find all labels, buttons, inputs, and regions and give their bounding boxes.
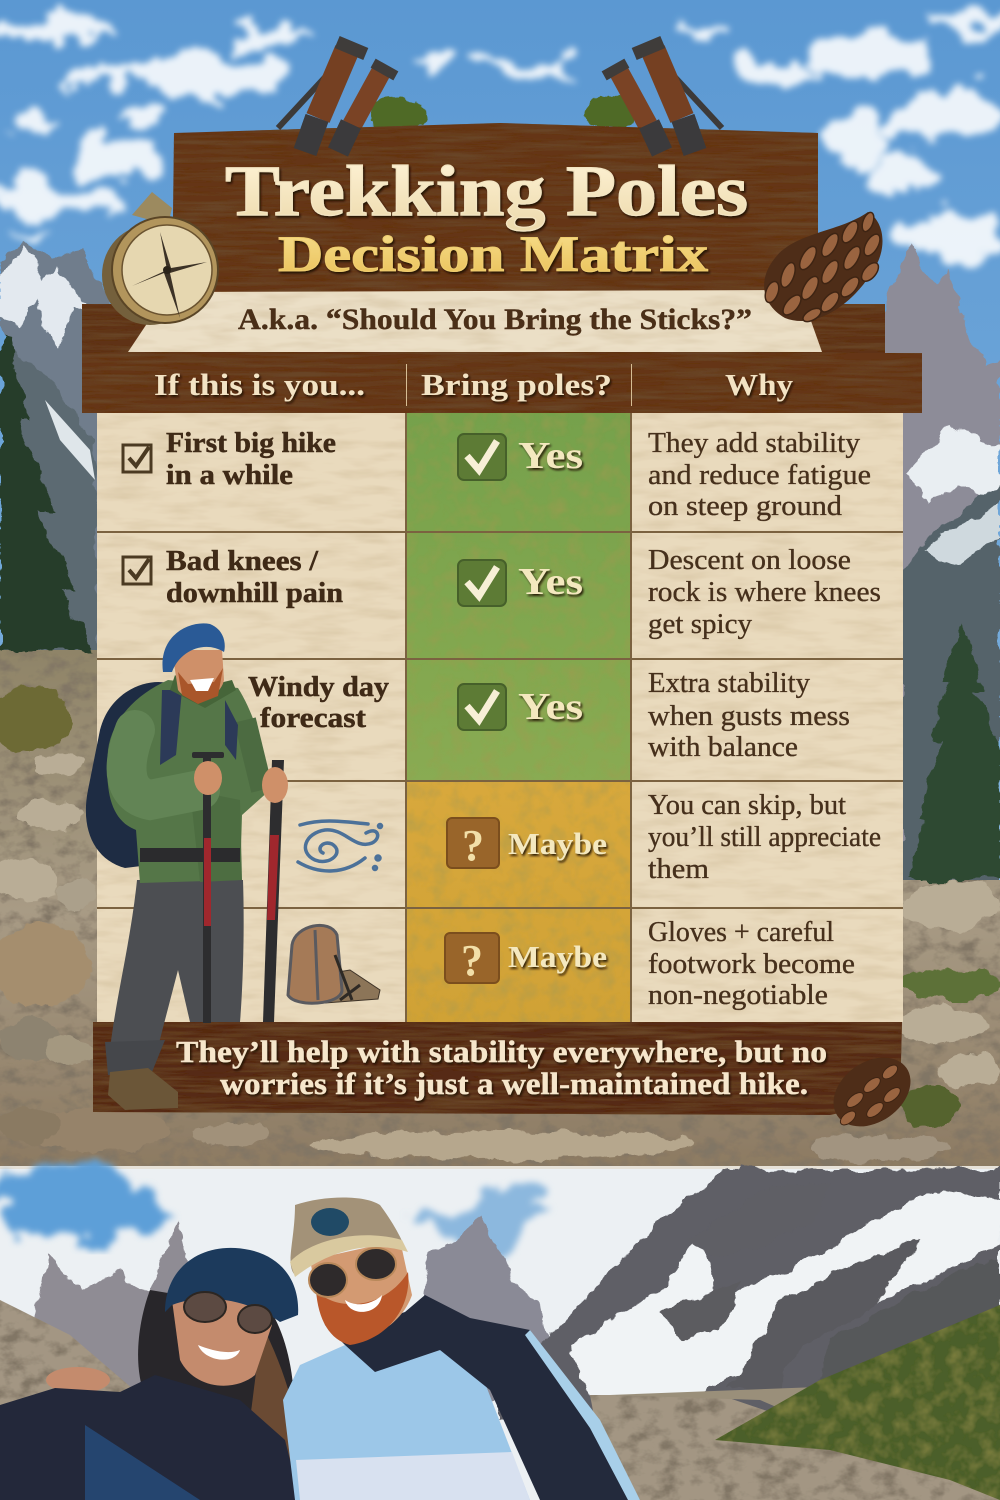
hair and hood xyxy=(138,1290,294,1440)
situation text: First big hike xyxy=(166,427,336,459)
right foreground rock and forest xyxy=(590,1395,1000,1500)
backpack xyxy=(86,682,190,868)
reason text: you’ll still appreciate xyxy=(648,821,881,853)
reason text: Gloves + careful xyxy=(648,916,834,948)
situation text xyxy=(166,427,336,491)
situation text xyxy=(166,545,343,609)
sunglasses xyxy=(184,1292,272,1333)
clouds xyxy=(0,15,1000,259)
collar xyxy=(170,675,236,708)
reason text: with balance xyxy=(648,731,798,763)
green answer cells xyxy=(406,413,631,781)
background: sky, mountains and rocky ground xyxy=(0,0,1000,1170)
answer: maybe: Maybe xyxy=(508,826,607,861)
answer: maybe xyxy=(447,818,607,870)
icon: checkbox xyxy=(123,445,151,472)
answer: maybe xyxy=(445,933,607,985)
reason text: Extra stability xyxy=(648,667,810,699)
icon: pine cone xyxy=(763,211,883,324)
reason text: when gusts mess xyxy=(648,700,850,732)
hiker with trekking poles xyxy=(86,623,288,1110)
answer: maybe: ? xyxy=(461,936,483,985)
column heading: If this is you... xyxy=(154,367,365,402)
dark hood and sleeve xyxy=(319,1295,640,1500)
reason text: non-negotiable xyxy=(648,979,828,1011)
boulders xyxy=(0,755,1000,1160)
left mountain xyxy=(0,240,110,660)
reason text: You can skip, but xyxy=(648,789,846,821)
row 1 xyxy=(123,427,871,522)
banner text: They’ll help with stability everywhere, but no xyxy=(176,1034,827,1069)
reason text xyxy=(648,667,850,763)
table header plank xyxy=(82,353,922,413)
blue jacket body xyxy=(283,1345,530,1500)
answer: yes: Yes xyxy=(518,435,583,477)
answer: maybe: ? xyxy=(462,821,484,870)
situation text: Windy day xyxy=(248,671,390,703)
ground xyxy=(0,650,1000,1170)
beard xyxy=(316,1272,408,1345)
pine tree right xyxy=(908,620,1000,880)
sunglasses xyxy=(309,1248,396,1297)
situation text: downhill pain xyxy=(166,577,343,609)
smile xyxy=(198,1345,240,1360)
answer: yes: Yes xyxy=(518,561,583,603)
photo sky xyxy=(0,1169,1000,1500)
pole clamps over the board xyxy=(305,118,695,152)
answer: yes: Yes xyxy=(518,686,583,728)
icon: checkbox xyxy=(123,557,151,584)
separator strip xyxy=(0,1166,1000,1169)
face xyxy=(172,1292,272,1386)
beanie xyxy=(162,623,225,672)
hands xyxy=(194,761,222,795)
row 5 xyxy=(288,916,855,1011)
cap xyxy=(291,1198,405,1275)
far arm xyxy=(245,720,262,790)
panel: tagline paper xyxy=(128,290,822,352)
white lower panel xyxy=(296,1452,530,1500)
shrubs behind sign xyxy=(368,97,428,133)
distant peaks xyxy=(15,1222,280,1400)
cap badge xyxy=(311,1208,349,1236)
panel: title board xyxy=(172,118,818,300)
jacket xyxy=(107,680,270,883)
right mountain spires xyxy=(860,245,1000,900)
reason text: them xyxy=(648,853,709,885)
column heading: Why xyxy=(725,367,794,402)
reason text xyxy=(648,789,881,885)
banner text: worries if it’s just a well-maintained hike. xyxy=(220,1066,808,1101)
icon: small pine cone xyxy=(820,1043,924,1141)
reason text: get spicy xyxy=(648,608,752,640)
woman xyxy=(0,1248,300,1500)
answer: maybe: Maybe xyxy=(508,939,607,974)
panel: matrix table xyxy=(97,413,903,1022)
title: Trekking Poles xyxy=(225,151,748,231)
icon: wind swirl xyxy=(298,821,382,871)
answer: yes xyxy=(458,684,583,730)
why column xyxy=(631,413,903,1022)
cap xyxy=(165,1248,298,1322)
icon: compass xyxy=(102,192,218,325)
panel: bottom banner xyxy=(93,1022,902,1115)
boot xyxy=(108,1068,178,1110)
reason text xyxy=(648,544,881,640)
near arm xyxy=(127,730,200,800)
answer: yes xyxy=(458,560,583,606)
reason text: and reduce fatigue xyxy=(648,459,871,491)
top trekking pole handles xyxy=(278,42,722,152)
left poles xyxy=(278,42,387,152)
right poles xyxy=(613,42,722,152)
answer: yes xyxy=(458,434,583,480)
situation text: Bad knees / xyxy=(166,545,319,577)
situation column xyxy=(97,413,406,1022)
reason text: They add stability xyxy=(648,427,861,459)
reason text: rock is where knees xyxy=(648,576,881,608)
reason text xyxy=(648,916,855,1011)
left scree slope xyxy=(0,1300,150,1500)
situation text xyxy=(248,671,390,734)
jacket xyxy=(0,1375,300,1500)
poles xyxy=(192,752,284,1023)
icon: backpack and boot xyxy=(288,925,380,1003)
row 2 xyxy=(123,544,881,640)
man xyxy=(283,1198,640,1500)
reason text: footwork become xyxy=(648,948,855,980)
panel: lower plank xyxy=(82,304,885,354)
reason text xyxy=(648,427,871,522)
reason text: on steep ground xyxy=(648,490,843,522)
hip belt xyxy=(140,848,240,862)
hand on shoulder xyxy=(46,1367,110,1393)
photo: couple selfie in the mountains xyxy=(0,1169,1000,1500)
shoulder straps xyxy=(160,690,238,765)
situation text: in a while xyxy=(166,459,293,491)
big snowy mountain xyxy=(500,1169,1000,1420)
face xyxy=(310,1240,412,1340)
column heading: Bring poles? xyxy=(421,367,612,402)
situation text: forecast xyxy=(260,702,366,734)
shrubs xyxy=(0,688,72,752)
subtitle: Decision Matrix xyxy=(278,227,709,283)
row 4 xyxy=(298,789,881,885)
pine tree left xyxy=(0,340,95,650)
head xyxy=(172,650,224,699)
reason text: Descent on loose xyxy=(648,544,851,576)
tagline text: A.k.a. “Should You Bring the Sticks?” xyxy=(238,303,752,336)
smile xyxy=(345,1295,382,1312)
trousers xyxy=(108,880,244,1075)
yellow answer cells xyxy=(406,781,631,1022)
row 3 xyxy=(248,667,850,763)
